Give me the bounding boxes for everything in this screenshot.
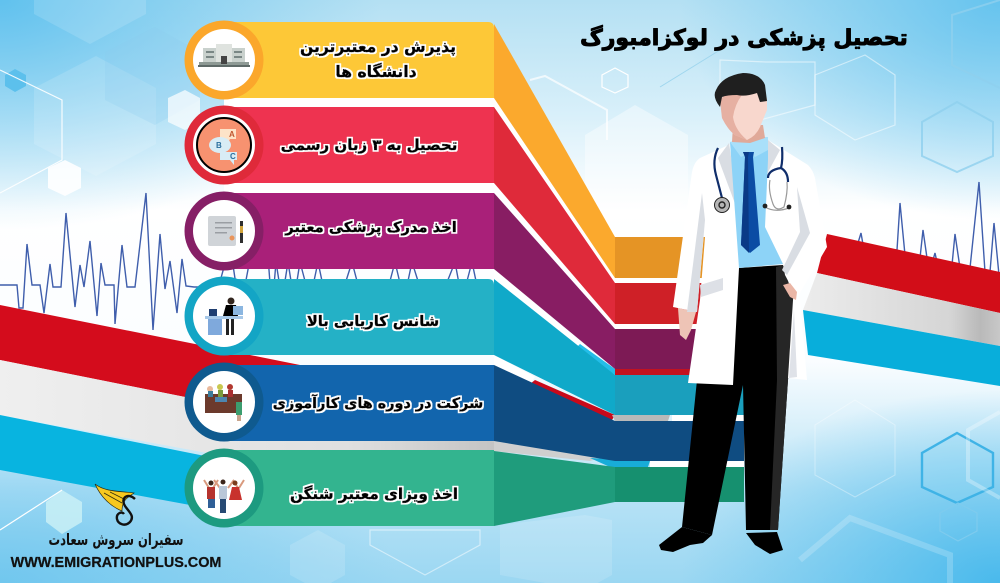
panel 6 ribbon: visa xyxy=(184,448,744,528)
text: employment: شانس کاریابی بالا xyxy=(307,313,439,330)
icon: speech bubbles: C xyxy=(230,152,236,161)
text: admission: دانشگاه ها xyxy=(335,62,417,81)
website url: WWW.EMIGRATIONPLUS.COM xyxy=(11,555,221,571)
panel 4 ribbon: employment xyxy=(184,276,744,415)
circle badge 5 xyxy=(184,362,264,442)
panel 1 ribbon: admission xyxy=(184,20,706,278)
icon: speech bubbles: A xyxy=(229,130,235,139)
text: internship: شرکت در دوره های کارآموزی xyxy=(273,394,483,412)
heartbeat line left xyxy=(0,190,494,330)
trousers xyxy=(682,265,794,535)
circle badge 3 xyxy=(184,192,264,270)
icon: speech bubbles: B xyxy=(216,141,222,150)
panel 5 ribbon: internship xyxy=(184,362,744,461)
heartbeat line right xyxy=(858,182,999,275)
circle badge 1 xyxy=(184,20,264,100)
flag ribbon right xyxy=(803,234,1000,386)
icon: celebrating people xyxy=(204,480,244,513)
panel 3 ribbon: degree xyxy=(184,192,698,369)
hair xyxy=(715,73,767,107)
title: تحصیل پزشکی در لوکزامبورگ xyxy=(580,25,908,51)
icon: person at desk xyxy=(205,298,243,335)
flag ribbon left xyxy=(0,305,494,520)
red gap by right arm xyxy=(794,227,800,243)
logo xyxy=(11,484,221,571)
text: visa: اخذ ویزای معتبر شنگن xyxy=(290,485,458,503)
icon: certificate and pen xyxy=(208,216,243,246)
left hand xyxy=(678,308,696,340)
icon: university building xyxy=(198,44,250,67)
white coat xyxy=(673,140,827,385)
shirt xyxy=(730,137,783,268)
brand name: سفیران سروش سعادت xyxy=(48,530,184,549)
shoes xyxy=(659,527,783,554)
text: admission xyxy=(300,38,456,81)
icon: winged emblem xyxy=(95,484,135,525)
collar xyxy=(730,137,768,157)
right hand xyxy=(783,283,797,300)
tie xyxy=(741,152,760,253)
text: degree: اخذ مدرک پزشکی معتبر xyxy=(284,219,457,236)
text: three languages: تحصیل به ۳ زبان رسمی xyxy=(281,136,457,154)
circle badge 4 xyxy=(184,276,264,356)
panel 2 ribbon: languages xyxy=(184,106,702,324)
doctor figure xyxy=(659,73,827,554)
ribbon fold gaps xyxy=(224,98,744,467)
neck and face xyxy=(720,88,767,143)
text: admission: پذیرش در معتبرترین xyxy=(300,38,456,57)
stethoscope xyxy=(714,147,791,212)
icon: classroom group xyxy=(205,384,242,421)
icon: speech bubbles xyxy=(209,129,237,165)
circle badge 6 xyxy=(184,448,264,528)
circle badge 2 xyxy=(184,106,264,184)
